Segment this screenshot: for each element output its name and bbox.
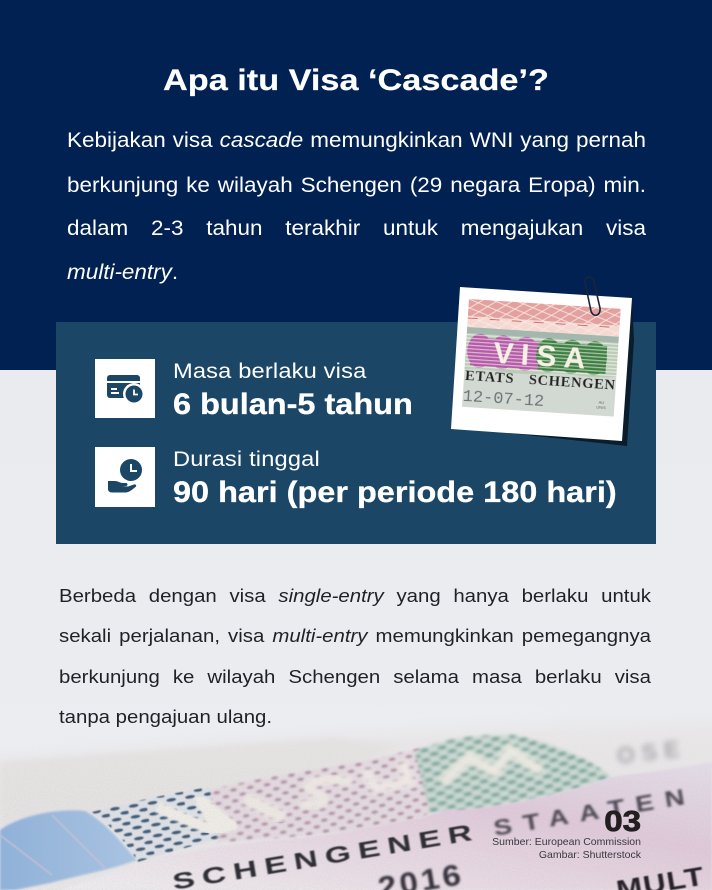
photo: Schengen visa polaroid with paperclip: 12-07-12 xyxy=(462,388,545,412)
photo: Schengen visa polaroid with paperclip: SCHENGEN xyxy=(528,372,616,394)
photo: Schengen visa polaroid with paperclip: AU xyxy=(598,400,604,405)
value: stay duration: 90 hari (per periode 180 hari) xyxy=(173,476,617,508)
navy header background xyxy=(0,0,712,370)
value: validity: 6 bulan-5 tahun xyxy=(173,388,413,420)
explanation text block: Berbeda dengan visa single-entry yang hanya berlaku untuk xyxy=(59,585,651,606)
icon: card with clock xyxy=(95,359,155,418)
photo print: faded top right text: OSE xyxy=(615,735,688,769)
source credits: Sumber: European Commission xyxy=(492,836,641,848)
explanation text block: tanpa pengajuan ulang. xyxy=(59,706,272,727)
intro text block xyxy=(67,129,646,284)
label: stay duration: Durasi tinggal xyxy=(173,447,320,471)
blue seal xyxy=(0,810,137,890)
visum letters xyxy=(157,800,232,830)
intro text block: multi-entry. xyxy=(67,261,178,284)
intro text block: Kebijakan visa cascade memungkinkan WNI yang pernah xyxy=(67,129,646,152)
photo print: STAATEN: STAATEN xyxy=(492,783,698,841)
lilac lower band xyxy=(60,762,712,890)
intro text block: dalam 2-3 tahun terakhir untuk mengajukan visa xyxy=(67,217,646,240)
passport paper xyxy=(0,720,712,890)
explanation text block: berkunjung ke wilayah Schengen selama masa berlaku visa xyxy=(59,666,651,687)
visum print xyxy=(92,787,222,862)
source credits xyxy=(492,836,641,860)
paper grain xyxy=(0,781,712,890)
photo: Schengen visa polaroid with paperclip: ETATS xyxy=(465,368,515,387)
paperclip xyxy=(585,277,600,315)
photo: Schengen visa polaroid with paperclip: UNIS xyxy=(596,404,606,410)
panel: visa facts xyxy=(56,322,656,544)
icon: hand with clock xyxy=(95,447,155,507)
explanation text block: sekali perjalanan, visa multi-entry memungkinkan pemegangnya xyxy=(59,625,651,646)
page number: 03 xyxy=(604,806,641,838)
source credits: Gambar: Shutterstock xyxy=(539,848,641,860)
explanation text block xyxy=(59,585,651,727)
title: Apa itu Visa ‘Cascade’? xyxy=(163,64,549,96)
photo: Schengen visa polaroid with paperclip: VISA xyxy=(492,337,586,376)
intro text block: berkunjung ke wilayah Schengen (29 negara Eropa) min. xyxy=(67,174,646,197)
background photo: visa passport page xyxy=(0,732,712,890)
label: validity: Masa berlaku visa xyxy=(173,359,366,383)
